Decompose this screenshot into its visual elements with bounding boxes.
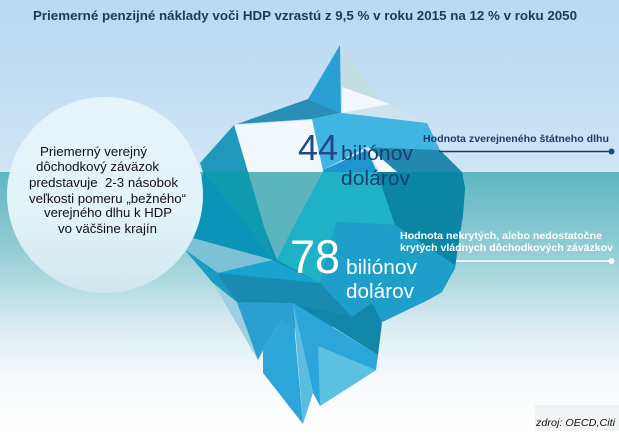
value 78 label: dolárov bbox=[346, 281, 414, 303]
value 78 label: 78 bbox=[290, 230, 340, 283]
label: unfunded obligations: krytých vládnych dôchodkových záväzkov bbox=[400, 242, 613, 254]
value 44 label: biliónov bbox=[341, 143, 413, 165]
circle callout bbox=[7, 97, 203, 293]
sea background bbox=[0, 172, 619, 435]
label: unfunded obligations bbox=[400, 230, 614, 264]
circle text: Priemerný verejný bbox=[40, 144, 148, 159]
iceberg below water bbox=[185, 172, 465, 424]
value 78 label: biliónov bbox=[346, 257, 417, 279]
label: published debt bbox=[423, 133, 614, 154]
label: published debt: Hodnota zverejneného štátneho dlhu bbox=[423, 133, 609, 145]
source box background bbox=[535, 405, 619, 431]
circle text bbox=[29, 144, 186, 236]
value 78 label bbox=[290, 230, 417, 303]
source: zdroj: OECD,Citi bbox=[535, 417, 616, 429]
circle text: verejného dlhu k HDP bbox=[44, 205, 172, 220]
circle text: predstavuje 2-3 násobok bbox=[29, 175, 179, 190]
sky background bbox=[0, 0, 619, 172]
value 44 label: 44 bbox=[298, 127, 338, 168]
label: unfunded obligations: Hodnota nekrytých, alebo nedostatočne bbox=[400, 230, 602, 242]
circle text: vo väčšine krajín bbox=[58, 221, 157, 236]
circle text: veľkosti pomeru „bežného“ bbox=[29, 191, 186, 206]
title: Priemerné penzijné náklady voči HDP vzrastú z 9,5 % v roku 2015 na 12 % v roku 2050 bbox=[33, 8, 577, 23]
iceberg above water bbox=[200, 45, 462, 172]
value 44 label: dolárov bbox=[341, 168, 410, 190]
circle text: dôchodkový záväzok bbox=[36, 159, 160, 174]
value 44 label bbox=[298, 127, 413, 190]
